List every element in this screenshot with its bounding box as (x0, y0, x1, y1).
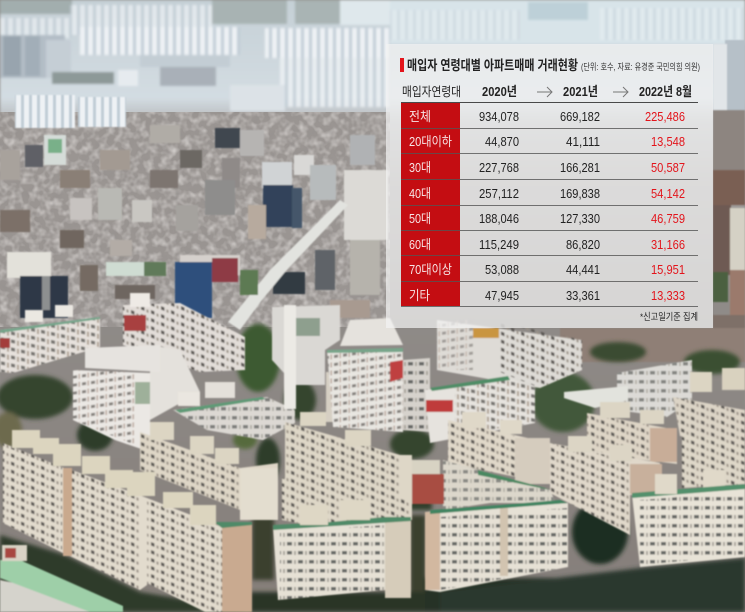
front apartment F (632, 474, 745, 567)
beige apartment centre-right (587, 402, 677, 464)
white apartment with red band (403, 358, 535, 443)
2021 values: 127,330 (560, 211, 600, 226)
front apartment D (273, 500, 411, 600)
2020 values: 44,870 (485, 134, 519, 149)
2021 values: 166,281 (560, 160, 600, 175)
2020 values: 257,112 (479, 186, 519, 201)
table header: 매입자연령대 (402, 85, 461, 99)
front apartment A (3, 430, 81, 557)
white apartment, right of centre (327, 318, 403, 432)
2020 values: 53,088 (485, 262, 519, 277)
2021 values: 669,182 (560, 109, 600, 124)
table header: 2021년 (563, 84, 598, 99)
2021 values (560, 109, 600, 303)
back row centre apartment (123, 293, 245, 372)
2020 values: 47,945 (485, 288, 519, 303)
title: 매입자 연령대별 아파트매매 거래현황 (407, 58, 578, 73)
2022 August values: 13,333 (651, 288, 685, 303)
2022 August values: 54,142 (651, 186, 685, 201)
apartment blocks (0, 293, 745, 612)
mid-rise towers and roads (0, 40, 745, 362)
front apartment E (425, 500, 568, 592)
white tall apartment (73, 345, 200, 452)
2020 values: 227,768 (479, 160, 519, 175)
arrow: 2021 to 2022 (613, 87, 628, 97)
back-row beige apartment, centre (282, 412, 412, 545)
tall apartment with orange band (437, 320, 582, 388)
lower-left green roof building (0, 545, 123, 612)
age-group labels: 전체 (409, 109, 431, 124)
front apartment C (147, 492, 252, 612)
arrow: 2020 to 2021 (537, 87, 552, 97)
title bar (400, 58, 404, 72)
table header: 2022년 8월 (639, 84, 692, 99)
front apartment B (72, 456, 155, 590)
2022 August values: 46,759 (651, 211, 685, 226)
back-row beige apartment, centre-left (140, 422, 278, 520)
right back apartment, flat roof (564, 360, 692, 417)
2020 values: 934,078 (479, 109, 519, 124)
footnote: *신고일기준 집계 (640, 311, 698, 323)
table header: 2020년 (482, 84, 517, 99)
table panel content (400, 58, 700, 323)
age-group labels: 50대 (409, 211, 431, 226)
tall white apartment with green panel (272, 305, 340, 422)
source note: (단위: 호수, 자료: 유경준 국민의힘 의원) (581, 61, 700, 72)
2021 values: 86,820 (566, 237, 600, 252)
2022 August values (645, 109, 685, 303)
2020 values: 188,046 (479, 211, 519, 226)
beige apartment far right (655, 433, 745, 497)
2021 values: 44,441 (566, 262, 600, 277)
age-group labels: 기타 (409, 288, 430, 303)
2022 August values: 225,486 (645, 109, 685, 124)
2021 values: 169,838 (560, 186, 600, 201)
age-group labels: 70대이상 (409, 262, 452, 277)
age-group labels: 20대이하 (409, 134, 452, 149)
2022 August values: 15,951 (651, 262, 685, 277)
trees (0, 324, 745, 612)
table header (402, 84, 692, 99)
2020 values (479, 109, 519, 303)
beige apartment right-centre (550, 436, 662, 535)
back row left apartment (0, 305, 100, 373)
age-group labels: 40대 (409, 186, 431, 201)
2021 values: 41,111 (566, 134, 600, 149)
age-group labels: 60대 (409, 237, 431, 252)
age-group labels: 30대 (409, 160, 431, 175)
panel: table background (386, 44, 713, 328)
low apartment with green roof centre (380, 460, 556, 510)
2022 August values: 50,587 (651, 160, 685, 175)
2022 August values: 13,548 (651, 134, 685, 149)
2021 values: 33,361 (566, 288, 600, 303)
age-group labels (409, 109, 452, 303)
dense low-rise neighbourhood (0, 112, 390, 327)
red age-group column (401, 103, 460, 306)
beige back row right (673, 368, 745, 447)
mid green-roof apartment (173, 382, 295, 440)
beige apartment centre (448, 412, 550, 484)
2020 values: 115,249 (479, 237, 519, 252)
mid-distance white apartment rows (15, 95, 126, 128)
2022 August values: 31,166 (651, 237, 685, 252)
